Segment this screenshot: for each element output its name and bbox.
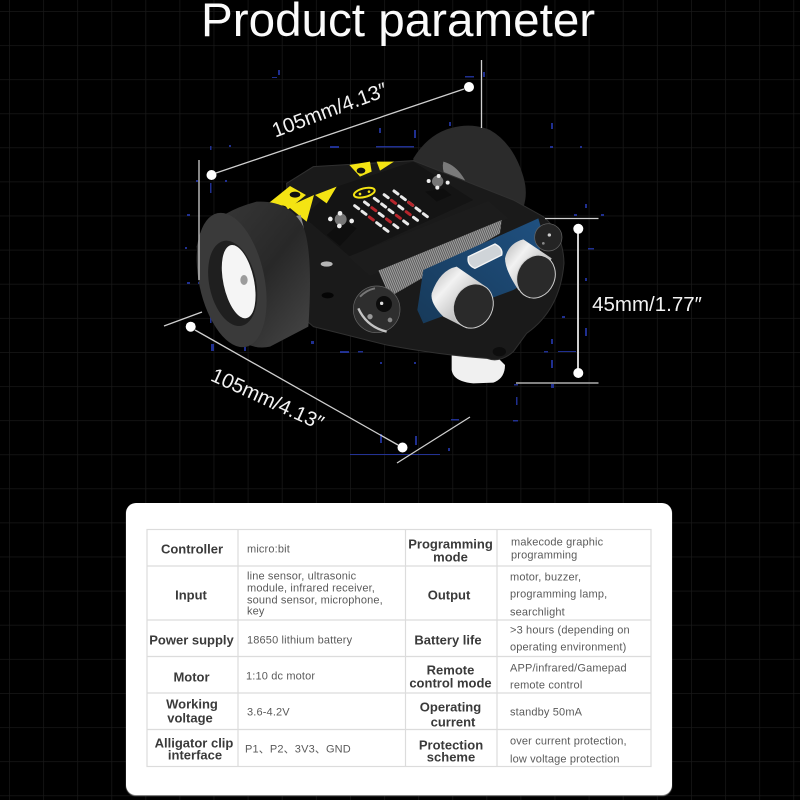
table text: voltage <box>167 710 213 726</box>
servo piece <box>452 347 505 383</box>
table text: Output <box>428 588 470 602</box>
table text: Working <box>166 696 218 712</box>
edge connector <box>348 201 508 276</box>
table text: control mode <box>409 676 492 690</box>
right rear wheel <box>413 126 526 210</box>
table text: Programming <box>408 536 493 552</box>
table text: P1、P2、3V3、GND <box>245 744 351 756</box>
label: top width: 105mm/4.13″ <box>269 78 391 142</box>
table text: Motor <box>173 670 210 684</box>
table text: Protection <box>419 738 483 752</box>
board <box>303 162 473 257</box>
table text: remote control <box>510 680 582 692</box>
table text: 18650 lithium battery <box>247 634 352 646</box>
table text: key <box>247 606 265 618</box>
infrared lens right <box>535 224 562 251</box>
table text: current <box>431 714 475 730</box>
micro:bit logo <box>353 186 376 199</box>
table text: line sensor, ultrasonic <box>247 570 356 582</box>
table text: 1:10 dc motor <box>246 670 315 682</box>
table text: module, infrared receiver, <box>247 582 375 594</box>
table text: Remote <box>427 662 474 678</box>
button A <box>327 220 357 246</box>
table text: Alligator clip <box>155 736 233 750</box>
table text: Input <box>175 588 207 602</box>
table text: low voltage protection <box>510 753 620 765</box>
button B <box>425 188 452 202</box>
yellow pads <box>268 162 394 222</box>
LED matrix <box>355 191 427 231</box>
table text: standby 50mA <box>510 706 582 718</box>
table text: searchlight <box>510 606 565 618</box>
table text: >3 hours (depending on <box>510 624 630 636</box>
table text: operating environment) <box>510 642 626 654</box>
table text: over current protection, <box>510 736 627 748</box>
ultrasonic sensor left <box>431 267 488 328</box>
table text: makecode graphic <box>511 536 603 548</box>
infrared lens left <box>353 286 400 333</box>
table text: Operating <box>420 700 481 714</box>
panel: parameter card <box>126 503 672 795</box>
label: height: 45mm/1.77″ <box>592 293 702 316</box>
pins <box>378 220 502 297</box>
table text: Controller <box>161 542 223 556</box>
table text: 3.6-4.2V <box>247 706 290 718</box>
silver connector tab <box>293 215 304 230</box>
crystal <box>468 244 502 268</box>
table text: sound sensor, microphone, <box>247 594 383 606</box>
table text: scheme <box>427 750 475 764</box>
table text: mode <box>433 550 468 564</box>
chassis holes <box>321 261 333 267</box>
table text: Power supply <box>149 632 234 648</box>
table text: interface <box>168 748 222 762</box>
ultrasonic board <box>417 218 543 323</box>
left front wheel <box>197 202 310 347</box>
table text: programming <box>511 550 577 562</box>
table text: motor, buzzer, <box>510 572 581 584</box>
table text: APP/infrared/Gamepad <box>510 662 627 674</box>
table text: programming lamp, <box>510 588 607 600</box>
label: bottom depth: 105mm/4.13″ <box>207 364 327 435</box>
ultrasonic sensor right <box>505 239 552 298</box>
chassis <box>287 161 564 360</box>
table text <box>149 536 630 765</box>
table text: Battery life <box>414 632 482 648</box>
table text: micro:bit <box>247 544 290 556</box>
